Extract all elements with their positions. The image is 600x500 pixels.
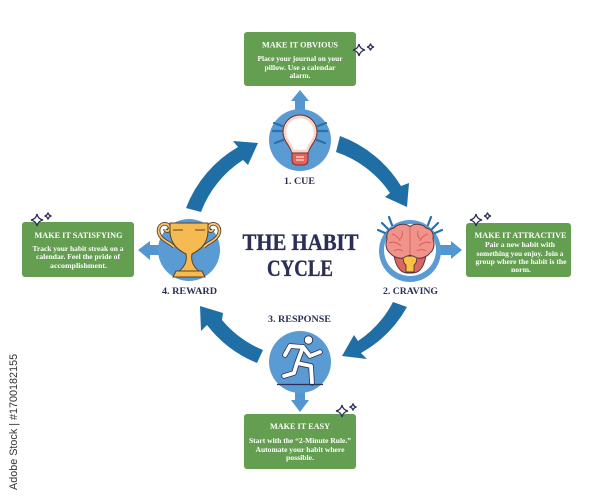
panel: make it easy: Automate your habit where [256, 445, 345, 454]
icon: sparkles right [470, 212, 491, 226]
label: craving: 2. CRAVING [383, 286, 439, 297]
panel: make it attractive: norm. [511, 265, 531, 274]
circle: craving [379, 220, 441, 282]
arrow: reward left [138, 241, 162, 260]
arrow: response to reward [200, 306, 263, 363]
panel: make it easy [244, 414, 356, 469]
circle: reward [158, 219, 220, 281]
panel: make it obvious: Place your journal on your [258, 54, 343, 63]
label: cue: 1. CUE [284, 176, 315, 187]
arrow: response down [291, 388, 309, 412]
label: reward: 4. REWARD [162, 286, 217, 297]
arrow: craving to response [342, 302, 407, 359]
label: response: 3. RESPONSE [268, 314, 331, 325]
stock credit: Adobe Stock | #1700182155 [8, 354, 20, 490]
panel: make it satisfying: calendar. Feel the pride of [36, 252, 121, 261]
icon: brain [378, 217, 442, 273]
node: cue [269, 90, 331, 187]
panel: make it attractive: something you enjoy. Join a [476, 249, 564, 258]
panel: make it satisfying: Track your habit streak on a [32, 244, 124, 253]
panel: make it satisfying: accomplishment. [50, 261, 107, 270]
panel: make it obvious [244, 32, 356, 86]
arrow: reward to cue [186, 141, 258, 212]
panel: make it attractive: group where the habit is the [476, 257, 567, 266]
icon: trophy [159, 223, 219, 277]
icon: runner [277, 336, 323, 384]
panel: make it attractive [466, 223, 571, 277]
circle: response [269, 331, 331, 393]
title: THE HABIT [242, 230, 358, 255]
icon: sparkles left [31, 212, 52, 226]
panel: make it attractive: Pair a new habit with [485, 240, 555, 249]
panel: make it easy: possible. [286, 453, 314, 462]
arrow: craving right [438, 241, 462, 259]
node: response [268, 314, 331, 412]
panel: make it satisfying [22, 222, 134, 277]
arrow: cue to craving [336, 136, 409, 207]
panel: make it obvious: MAKE IT OBVIOUS [262, 40, 338, 50]
icon: sparkles top [353, 44, 374, 56]
title: CYCLE [267, 256, 333, 281]
node: reward [138, 219, 220, 297]
circle: cue [269, 109, 331, 171]
icon: light bulb [273, 115, 327, 165]
panel: make it easy: Start with the “2-Minute Rule.” [249, 436, 351, 445]
icon: sparkles bottom [336, 404, 356, 417]
panel: make it obvious: alarm. [290, 71, 311, 80]
title [242, 230, 358, 281]
panel: make it satisfying: MAKE IT SATISFYING [34, 230, 123, 240]
arrow: cue up [291, 90, 309, 112]
panel: make it attractive: MAKE IT ATTRACTIVE [474, 230, 567, 240]
node: craving [378, 217, 462, 297]
panel: make it easy: MAKE IT EASY [270, 421, 331, 431]
panel: make it obvious: pillow. Use a calendar [264, 63, 336, 72]
